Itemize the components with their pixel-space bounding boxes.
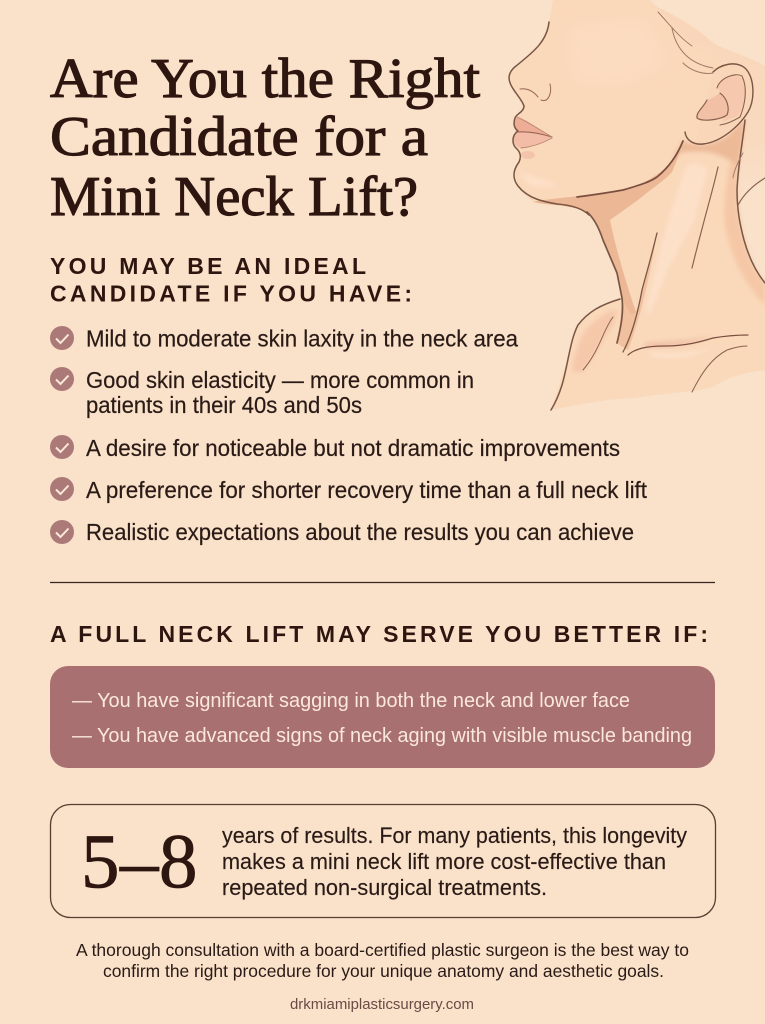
jaw shadow xyxy=(533,150,681,322)
heading: ideal candidate: YOU MAY BE AN IDEAL xyxy=(50,253,366,279)
ear outline xyxy=(685,64,753,144)
illustration: face and neck profile xyxy=(509,0,765,410)
list item 1: Mild to moderate skin laxity in the neck area xyxy=(86,326,518,352)
back neck shade xyxy=(724,120,765,305)
stat description: repeated non-surgical treatments. xyxy=(222,875,547,900)
heading: full neck lift: A FULL NECK LIFT MAY SERVE YOU BETTER IF: xyxy=(50,621,708,647)
list item 4: A preference for shorter recovery time than a full neck lift xyxy=(86,477,648,503)
panel: full neck lift reasons: — You have advanced signs of neck aging with visible muscle banding xyxy=(72,724,692,747)
stat description xyxy=(222,823,687,900)
cheek highlight xyxy=(570,20,665,83)
lips xyxy=(514,117,552,137)
chin blush xyxy=(521,151,535,159)
website: drkmiamiplasticsurgery.com xyxy=(290,997,474,1013)
list item 3: A desire for noticeable but not dramatic improvements xyxy=(86,435,620,461)
closing note: confirm the right procedure for your unique anatomy and aesthetic goals. xyxy=(103,961,664,981)
list item 2 xyxy=(50,367,474,418)
collar tint xyxy=(645,336,712,347)
jawline xyxy=(577,141,683,197)
hair zone xyxy=(640,0,765,200)
heading: ideal candidate xyxy=(50,253,412,306)
list item 2: Good skin elasticity — more common in xyxy=(86,367,474,393)
list item 2: patients in their 40s and 50s xyxy=(86,392,362,418)
collar highlight xyxy=(650,347,715,358)
checklist xyxy=(50,326,648,545)
closing note: A thorough consultation with a board-certified plastic surgeon is the best way to xyxy=(76,940,689,960)
list item 5: Realistic expectations about the results you can achieve xyxy=(86,519,634,545)
neck back xyxy=(737,120,765,283)
panel: results callout xyxy=(50,804,716,918)
nose, lips and chin outline xyxy=(509,22,589,215)
hairlines xyxy=(658,12,713,73)
ear fill xyxy=(695,64,753,144)
stat description: years of results. For many patients, this longevity xyxy=(222,823,687,848)
under-ear shade xyxy=(672,120,745,165)
skin base xyxy=(509,0,765,410)
closing note xyxy=(76,940,689,981)
title xyxy=(50,48,480,228)
stat description: makes a mini neck lift more cost-effective than xyxy=(222,849,666,874)
left shoulder shade xyxy=(572,310,617,372)
stat: 5–8: 5–8 xyxy=(81,818,198,904)
front neck line xyxy=(587,212,623,343)
chin highlight xyxy=(520,172,560,187)
heading: ideal candidate: CANDIDATE IF YOU HAVE: xyxy=(50,280,412,306)
title: Candidate for a xyxy=(50,106,428,168)
shoulder lines xyxy=(551,299,620,410)
panel: full neck lift reasons: — You have significant sagging in both the neck and lower face xyxy=(72,689,630,712)
panel: full neck lift reasons xyxy=(50,666,715,768)
neck muscle lines xyxy=(692,167,718,268)
neck light band xyxy=(645,164,708,315)
title: Mini Neck Lift? xyxy=(50,166,418,228)
title: Are You the Right xyxy=(50,48,480,110)
sternomastoid shade xyxy=(618,233,657,350)
